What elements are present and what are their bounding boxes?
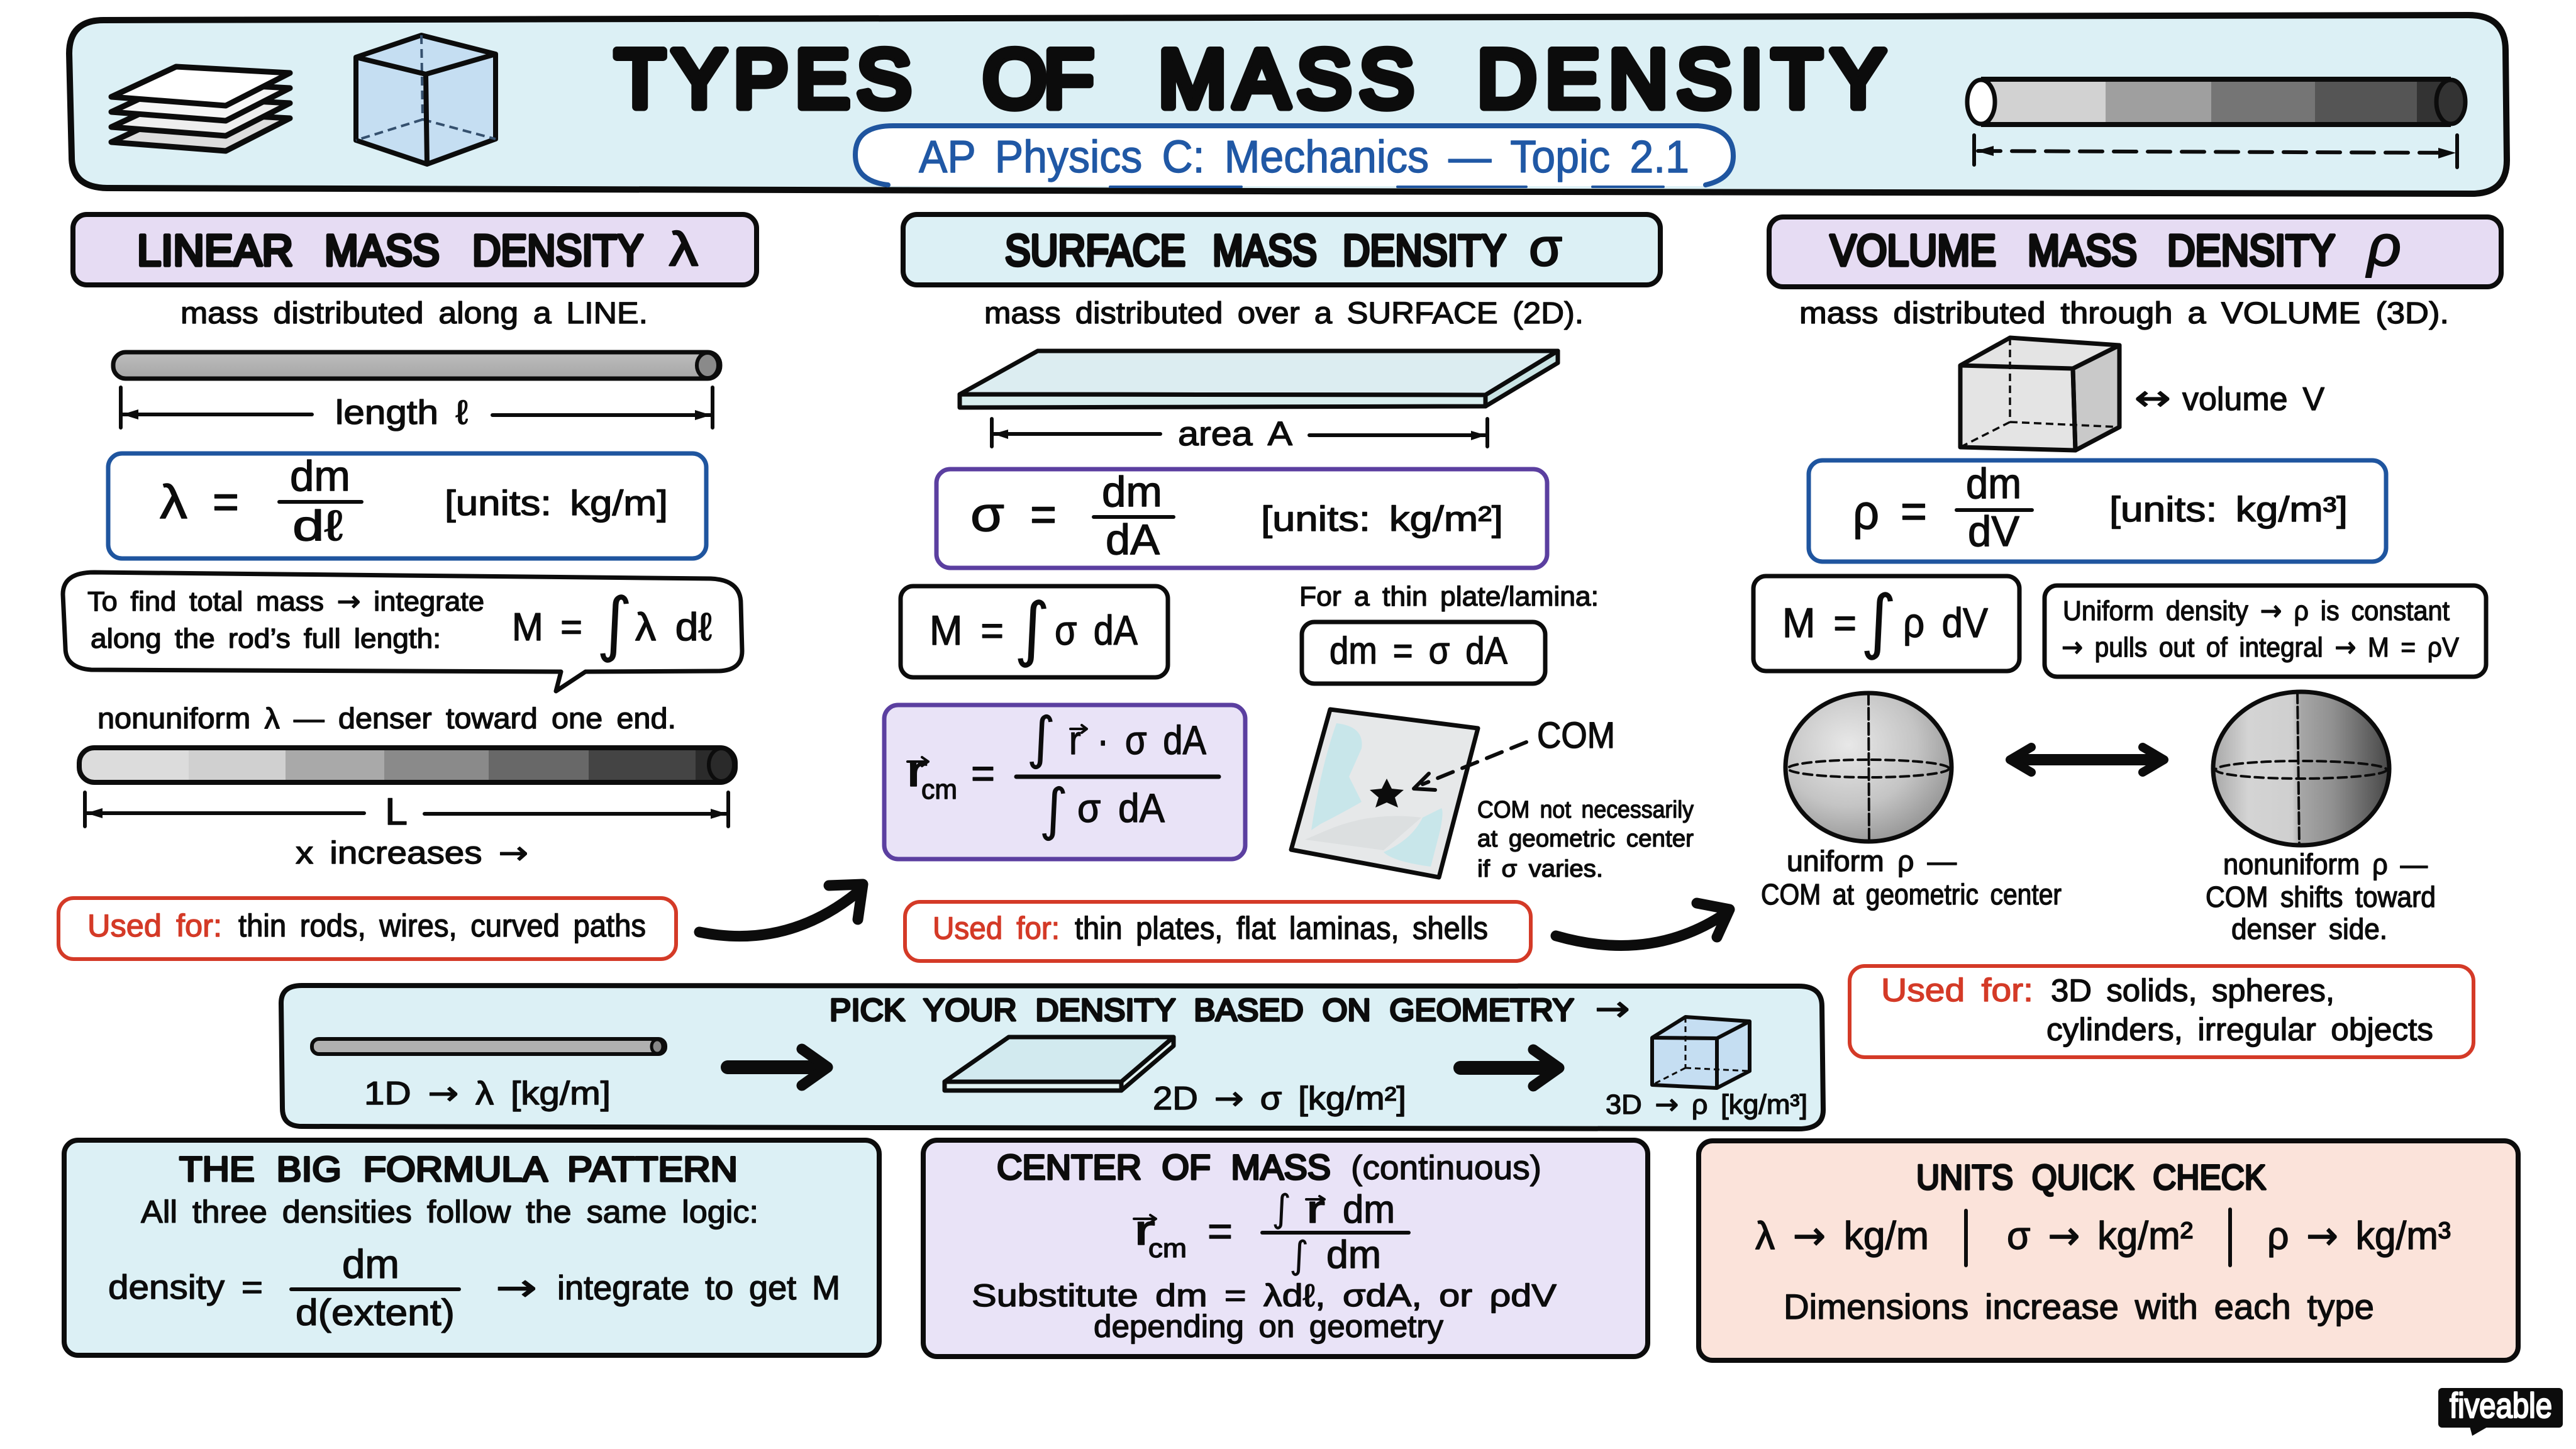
text: substitute: Substitute dm = λdℓ, σdA, or ρdV [972,1278,1557,1313]
units row: ρ → kg/m³ [2267,1213,2451,1258]
description: linear: mass distributed along a LINE. [180,297,648,330]
heading: linear: λ [669,223,698,276]
formula: continuous COM: cm [1148,1233,1187,1263]
formula: continuous COM: r [1306,1188,1325,1231]
title: MASS [1158,33,1414,125]
formula: rho: = [1901,485,1927,538]
label: 2D: 2D → σ [kg/m²] [1153,1080,1406,1118]
used for: surface [905,902,1531,961]
heading: volume: DENSITY [2167,226,2335,275]
panel: linear mass density [58,214,757,959]
formula: M integral rho [1753,576,2019,671]
title: DENSITY [1477,33,1885,125]
heading: linear [73,214,757,285]
label: nonuniform lambda: nonuniform λ — denser toward one end. [97,702,676,735]
formula: center of mass surface: σ dA [1077,786,1165,831]
formula: M integral rho: ∫ [1860,580,1897,662]
dimension: L: L [385,791,408,833]
heading: linear: MASS [325,226,440,275]
callout: integrate: ∫ [596,583,633,665]
formula: rho [1809,460,2386,562]
formula: M integral rho: M = [1782,599,1857,646]
formula: density: density = [108,1269,263,1306]
used for: surface: Used for: [933,911,1060,946]
heading: volume [1769,214,2501,287]
panel: volume mass density [1753,214,2501,1057]
formula: lambda: dℓ [292,502,343,550]
formula: lambda: [units: kg/m] [445,483,668,523]
label: 1D: 1D → λ [kg/m] [364,1075,611,1113]
formula: M integral sigma [901,586,1168,677]
used for: volume [1850,966,2473,1057]
title: TYPES [615,33,911,125]
units row: λ → kg/m [1755,1213,1929,1258]
arrow: linear to surface [699,884,863,936]
formula: center of mass surface [884,705,1245,859]
text: substitute [972,1278,1557,1344]
formula: lambda [108,452,706,558]
icon: uniform sphere [1785,693,1951,841]
used for: volume: 3D solids, spheres, [2051,973,2334,1008]
heading: volume: MASS [2028,226,2137,275]
formula: sigma: = [1030,488,1057,541]
used for: volume: Used for: [1881,972,2033,1009]
heading: surface: DENSITY [1343,226,1506,275]
formula: rho: [units: kg/m³] [2109,489,2348,529]
units row: σ → kg/m² [2007,1213,2193,1258]
heading: center of mass: CENTER OF MASS [997,1147,1331,1187]
note: COM not at center: COM not necessarily [1477,797,1694,823]
icon: uniform rod [113,352,720,379]
heading: pick your density: PICK YOUR DENSITY BASED ON GEOMETRY [830,992,1574,1028]
heading: linear: DENSITY [472,226,643,275]
label: x increases: x increases → [296,835,528,871]
arrow: 1D to 2D [728,1049,828,1085]
formula: lambda: dm [290,452,350,500]
arrow: surface to volume [1556,903,1729,945]
formula: continuous COM [1134,1187,1409,1277]
note: uniform density: → pulls out of integral → M = ρV [2062,631,2460,663]
panel: pick your density [281,985,1823,1129]
icon: graded rod with dashed dimension [1967,79,2465,167]
formula: density: d(extent) [296,1292,455,1333]
arrow: double headed [2010,747,2164,772]
formula: M integral rho: ρ dV [1903,599,1988,646]
label: volume V: volume V [2182,381,2324,418]
text: dimensions: Dimensions increase with each type [1784,1287,2374,1326]
formula: continuous COM: = [1208,1208,1233,1254]
formula: M integral sigma: σ dA [1055,607,1138,653]
formula: dm sigma dA: dm = σ dA [1330,630,1507,672]
caption: nonuniform sphere [2206,848,2436,945]
formula: continuous COM: ∫ [1289,1233,1309,1277]
icon: stacked sheets [111,67,290,151]
icon: plate with COM star [1291,709,1526,877]
formula: dm sigma dA [1302,622,1545,684]
label: volume V [2135,378,2324,419]
formula: center of mass surface: r · σ dA [1069,718,1206,763]
label: volume V: ↔ [2135,378,2171,419]
arrow: 2D to 3D [1460,1050,1559,1086]
formula: rho: ρ [1853,484,1879,540]
dimension: length [121,387,713,431]
used for: linear [58,898,676,959]
formula: rho: dV [1968,508,2020,555]
callout: integrate: λ dℓ [635,606,712,649]
formula: continuous COM: dm [1326,1233,1381,1277]
formula: density: dm [342,1241,399,1287]
formula: continuous COM: ∫ [1272,1187,1291,1231]
formula: sigma: dm [1102,468,1162,516]
formula: sigma [936,468,1547,568]
panel: surface mass density [884,214,1694,961]
formula: sigma: σ [970,486,1004,541]
icon: glass cube [356,35,496,164]
note: uniform density: Uniform density → ρ is constant [2063,595,2450,627]
icon: grey cube [1960,338,2119,450]
used for: volume: cylinders, irregular objects [2046,1012,2433,1047]
text: same logic: All three densities follow the same logic: [141,1194,758,1230]
description: volume: mass distributed through a VOLUME (3D). [1799,297,2449,330]
heading: surface [903,214,1660,285]
units row [1755,1209,2451,1265]
title: OF [983,33,1094,125]
heading: volume: ρ [2365,214,2401,278]
callout: integrate: M = [512,606,582,649]
text: substitute: depending on geometry [1094,1309,1443,1344]
icon: small plate [945,1037,1174,1091]
formula: density: → [496,1266,537,1310]
callout: integrate: along the rod’s full length: [91,623,441,654]
formula: lambda: λ [160,475,187,529]
arrow: COM pointer [1414,742,1526,790]
dimension: area: area A [1178,415,1292,453]
caption: nonuniform sphere: denser side. [2231,913,2387,945]
caption: uniform sphere [1761,845,2062,911]
formula: center of mass surface: r [906,746,928,796]
heading: surface: σ [1529,218,1562,277]
used for: linear: Used for: [87,908,222,943]
formula: continuous COM: dm [1343,1188,1395,1231]
logo: fiveable [2438,1385,2563,1436]
icon: small cube [1652,1017,1750,1088]
icon: graded rod [79,748,735,782]
used for: linear: thin rods, wires, curved paths [238,908,646,943]
heading: surface: SURFACE [1005,226,1185,275]
formula: center of mass surface: ∫ [1026,705,1056,771]
formula: M integral sigma: ∫ [1014,588,1050,670]
formula: center of mass surface: cm [921,774,957,805]
header banner [69,15,2507,194]
heading: big formula: THE BIG FORMULA PATTERN [179,1149,738,1189]
note: uniform density [2045,586,2486,677]
caption: nonuniform sphere: COM shifts toward [2206,880,2436,913]
icon: thin rod [312,1039,665,1054]
heading: surface: MASS [1213,226,1317,275]
heading: linear: LINEAR [137,226,293,275]
label: thin plate: For a thin plate/lamina: [1299,581,1599,612]
icon: star [1370,779,1404,808]
arrow: heading: → [1595,989,1630,1030]
icon: flat plate [960,351,1558,408]
heading: units: UNITS QUICK CHECK [1916,1157,2266,1197]
caption: uniform sphere: uniform ρ — [1787,845,1957,877]
used for: surface: thin plates, flat laminas, shells [1075,911,1488,946]
icon: nonuniform sphere [2213,692,2389,846]
heading: volume: VOLUME [1830,226,1996,275]
heading: center of mass: (continuous) [1351,1149,1541,1187]
panel: big formula pattern [64,1140,879,1355]
dimension: area [992,415,1487,453]
heading: center of mass [997,1147,1541,1187]
note: COM not at center [1477,797,1694,882]
formula: rho: dm [1966,460,2021,508]
formula: sigma: [units: kg/m²] [1261,499,1503,538]
panel: center of mass [923,1140,1648,1357]
dimension: length: length ℓ [335,394,468,431]
note: COM not at center: at geometric center [1477,826,1694,852]
caption: nonuniform sphere: nonuniform ρ — [2223,848,2428,880]
caption: uniform sphere: COM at geometric center [1761,878,2062,911]
formula: sigma: dA [1106,516,1160,564]
subtitle pill: AP Physics C: Mechanics — Topic 2.1 [919,132,1689,182]
title [615,33,1885,125]
callout: integrate [63,572,742,691]
callout: integrate: To find total mass → integrate [87,586,484,618]
panel: units quick check [1699,1141,2518,1360]
formula: lambda: = [213,475,239,529]
formula: center of mass surface: ∫ [1039,777,1069,843]
label: COM: COM [1537,715,1615,756]
label: 3D: 3D → ρ [kg/m³] [1606,1089,1807,1121]
formula: density [108,1241,840,1333]
logo: fiveable: fiveable [2450,1385,2552,1425]
formula: center of mass surface: = [971,750,995,796]
formula: density: integrate to get M [557,1269,840,1307]
dimension: L [85,791,728,833]
description: surface: mass distributed over a SURFACE (2D). [984,297,1584,330]
formula: M integral sigma: M = [930,607,1004,653]
note: COM not at center: if σ varies. [1477,856,1603,882]
formula: continuous COM: r [1134,1206,1155,1254]
